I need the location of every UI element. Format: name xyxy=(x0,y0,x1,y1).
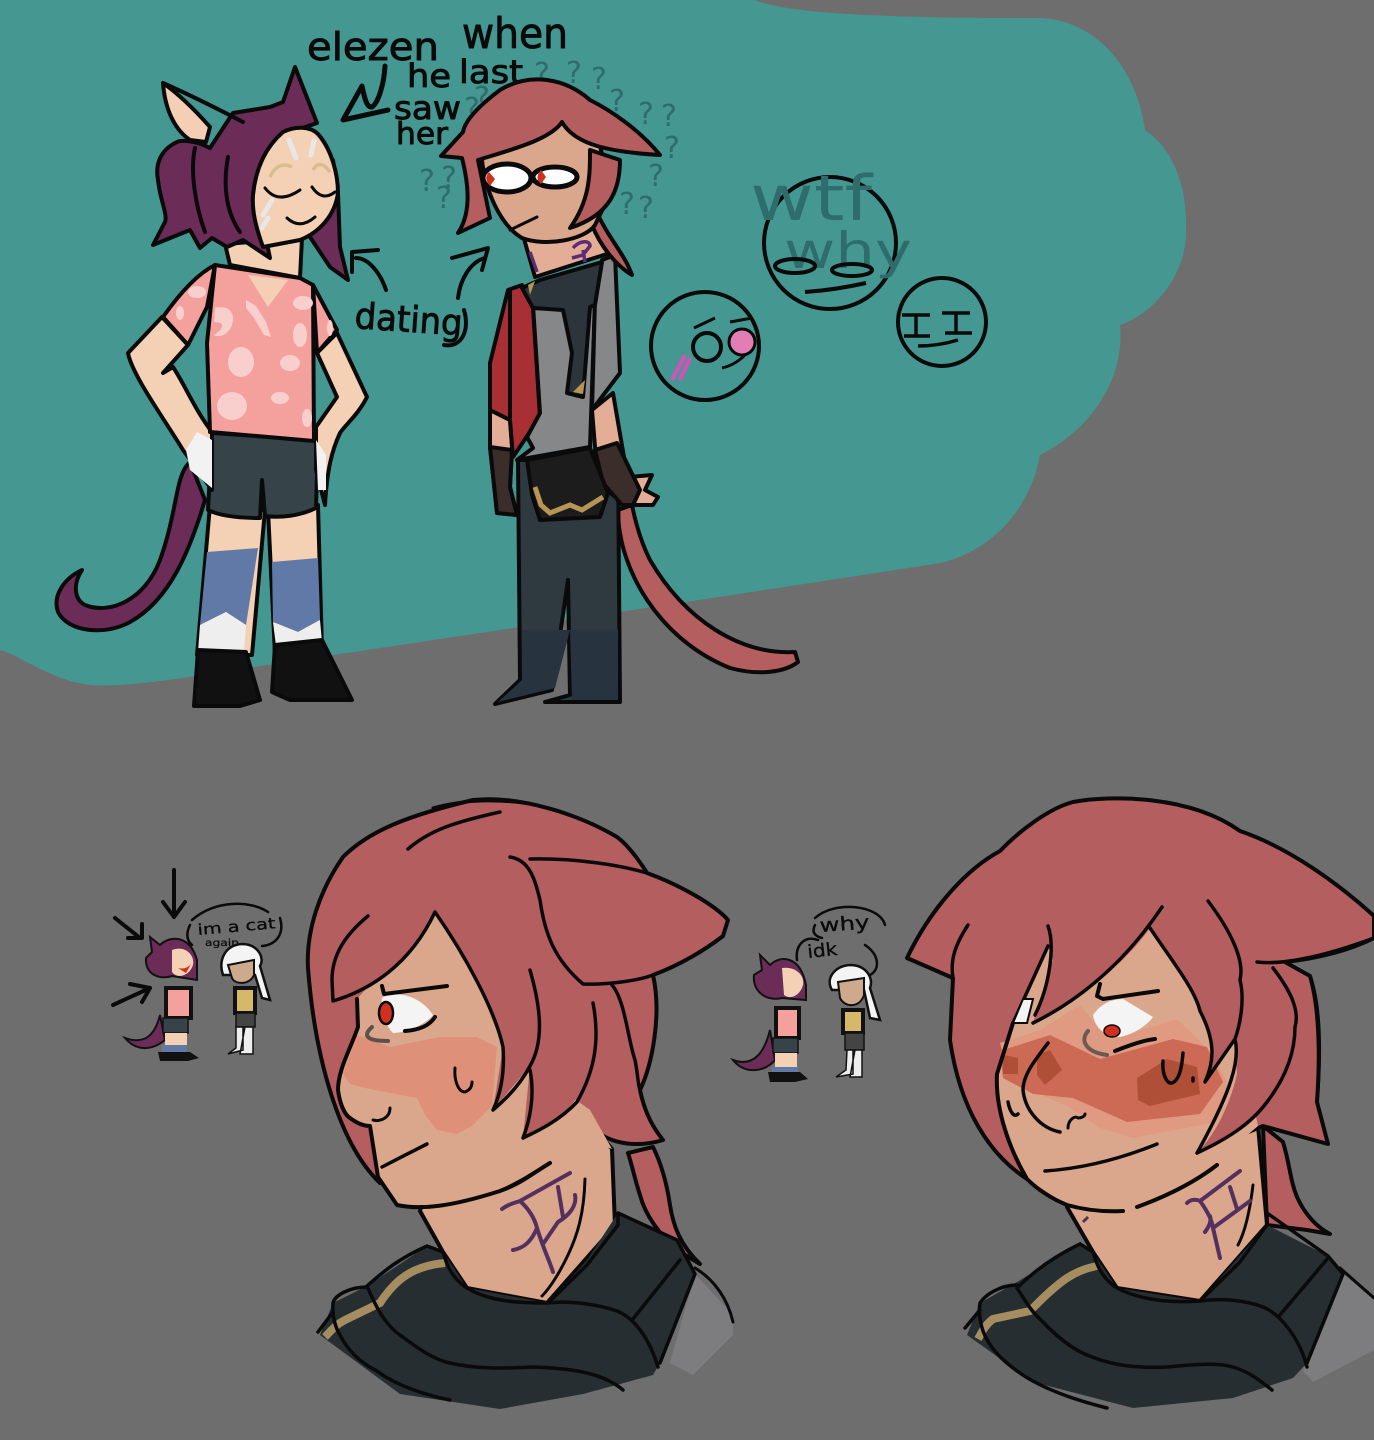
grey cloak xyxy=(670,1274,733,1375)
annotation: elezen when he last saw her: elezen xyxy=(307,25,439,69)
scarf folds xyxy=(965,1213,1343,1408)
white haired mini xyxy=(843,1010,863,1033)
side strand xyxy=(310,160,348,280)
iris xyxy=(1104,1025,1120,1037)
arrow: to woman xyxy=(343,66,388,120)
sweat drop xyxy=(455,1068,472,1092)
teal blob xyxy=(0,0,1186,685)
grey cloak xyxy=(1303,1274,1374,1382)
question marks: ? xyxy=(474,81,490,116)
big head right xyxy=(907,798,1374,1408)
annotation: elezen when he last saw her: he xyxy=(407,57,451,95)
tail xyxy=(618,505,798,672)
neck xyxy=(420,1100,615,1303)
legs xyxy=(197,505,322,655)
annotation: elezen when he last saw her: when xyxy=(462,9,568,58)
chin crease xyxy=(500,1163,550,1191)
annotation: elezen when he last saw her: her xyxy=(396,117,449,152)
front hair xyxy=(1000,830,1280,1153)
face outline xyxy=(997,1023,1217,1211)
right arm xyxy=(316,333,367,505)
right arm skin xyxy=(592,393,658,505)
sleeves xyxy=(163,265,337,353)
question marks: ? xyxy=(436,181,452,216)
hair silhouette xyxy=(308,799,728,1183)
boots xyxy=(194,640,352,706)
grey vest xyxy=(517,300,595,460)
head xyxy=(482,110,612,242)
face xyxy=(253,128,338,247)
question marks: ? xyxy=(534,57,550,92)
hair strands xyxy=(193,148,240,232)
scarf xyxy=(320,1213,695,1409)
question marks: ? xyxy=(664,131,680,166)
shorts xyxy=(208,433,318,518)
speech text: im a cat xyxy=(197,914,276,939)
blush xyxy=(343,1035,497,1134)
red cape xyxy=(490,285,540,457)
question marks: ? xyxy=(661,99,677,134)
nose xyxy=(1023,1043,1060,1132)
braid xyxy=(592,215,632,275)
blush mid xyxy=(1000,1035,1223,1122)
iris xyxy=(379,1002,393,1024)
grey right panel xyxy=(592,255,620,410)
small tattoo xyxy=(1083,1217,1088,1222)
tail xyxy=(733,1030,775,1070)
question marks: ? xyxy=(619,187,635,222)
arrow: dating right xyxy=(452,248,488,298)
question marks: ? xyxy=(638,191,654,226)
question marks xyxy=(419,56,680,226)
wrist cuffs xyxy=(186,432,326,490)
left arm xyxy=(128,317,212,490)
top tuft xyxy=(433,801,573,816)
cloak line xyxy=(695,1268,733,1322)
face xyxy=(338,912,612,1205)
scarf folds xyxy=(318,1213,695,1400)
hair xyxy=(153,67,317,258)
tattoo xyxy=(502,1173,575,1272)
braid xyxy=(628,1147,700,1264)
hair and ear xyxy=(441,79,660,233)
arrows xyxy=(113,870,185,1005)
trousers xyxy=(495,460,620,704)
shirt xyxy=(207,265,314,441)
woman full body xyxy=(57,67,367,706)
eye bag xyxy=(367,1027,388,1041)
question marks: ? xyxy=(609,84,625,119)
tail xyxy=(125,1015,165,1048)
belt bag xyxy=(527,448,608,520)
braid xyxy=(1263,1126,1330,1234)
emote: wtf why face: wtf xyxy=(750,162,875,235)
question marks: ? xyxy=(441,161,457,196)
mouth xyxy=(382,1144,427,1167)
woman mini xyxy=(776,1008,799,1038)
neck crease xyxy=(1238,1185,1253,1245)
face markings xyxy=(262,140,314,228)
mouth xyxy=(510,217,537,230)
emote: wtf why face: why xyxy=(784,222,912,280)
brow and lash xyxy=(1097,984,1158,1051)
small figures group left: again xyxy=(205,938,239,949)
small figures group right: idk xyxy=(806,939,839,963)
question marks: ? xyxy=(591,62,607,97)
scarf tips xyxy=(528,281,585,394)
annotation: elezen when he last saw her: saw xyxy=(394,89,461,127)
hair lines xyxy=(952,901,1374,1153)
scarf xyxy=(967,1225,1343,1408)
cloak line xyxy=(1340,1268,1374,1298)
emote: wtf why face xyxy=(750,162,912,309)
small figures group right xyxy=(733,907,885,1082)
woman mini xyxy=(166,988,191,1018)
question marks: ? xyxy=(648,159,664,194)
ear back line xyxy=(163,83,243,122)
dating label: dating xyxy=(353,296,464,345)
annotation: elezen when he last saw her: last xyxy=(459,53,523,91)
big head left xyxy=(308,799,733,1409)
tail xyxy=(57,462,205,630)
brow and lash xyxy=(382,986,447,1031)
hair lines xyxy=(332,812,653,1138)
hair silhouette xyxy=(907,798,1374,1190)
neck xyxy=(225,238,302,278)
eyes and mouth xyxy=(265,187,335,224)
question marks: ? xyxy=(566,56,582,91)
question marks: ? xyxy=(464,92,480,127)
arrow: dating left xyxy=(352,250,386,290)
sweat marks xyxy=(1008,1053,1193,1115)
eye xyxy=(382,994,433,1033)
face xyxy=(996,925,1258,1211)
neck crease xyxy=(542,1179,585,1296)
nostril xyxy=(1068,1114,1085,1128)
left arm skin and glove xyxy=(490,410,517,515)
tattoo xyxy=(1187,1171,1250,1258)
neck xyxy=(522,225,610,277)
scarf xyxy=(522,262,602,397)
speech bubble xyxy=(187,904,281,946)
question marks: ? xyxy=(419,164,435,199)
front hair xyxy=(332,830,600,1138)
question marks: ? xyxy=(638,97,654,132)
left eye sliver xyxy=(1013,999,1033,1023)
blush outer xyxy=(1000,1005,1227,1138)
man full body xyxy=(441,79,798,704)
mouth xyxy=(1045,1144,1157,1171)
blush dark patches xyxy=(1003,1050,1200,1106)
small figures group left xyxy=(113,870,281,1061)
v neck xyxy=(248,275,288,307)
mask glasses eyes xyxy=(483,164,577,192)
scarf stripe xyxy=(978,1266,1097,1339)
ear xyxy=(163,83,210,142)
neck tattoo xyxy=(530,242,590,272)
side hair xyxy=(570,150,620,228)
nose xyxy=(373,1108,390,1120)
speech bubbles xyxy=(797,907,885,975)
socks xyxy=(200,548,320,632)
shirt spots xyxy=(176,286,333,427)
speech text: why xyxy=(819,912,870,937)
neck xyxy=(1067,1126,1267,1301)
eye xyxy=(1093,999,1153,1037)
emote: blush face xyxy=(651,292,759,400)
scarf stripe xyxy=(325,1263,445,1337)
white haired mini xyxy=(235,988,255,1013)
emote: flat face xyxy=(898,278,986,366)
right glove xyxy=(595,443,640,505)
dating hook xyxy=(444,310,466,345)
annotation: elezen when he last saw her xyxy=(307,9,568,152)
face outline xyxy=(338,999,550,1207)
eye bag xyxy=(1084,1031,1107,1055)
